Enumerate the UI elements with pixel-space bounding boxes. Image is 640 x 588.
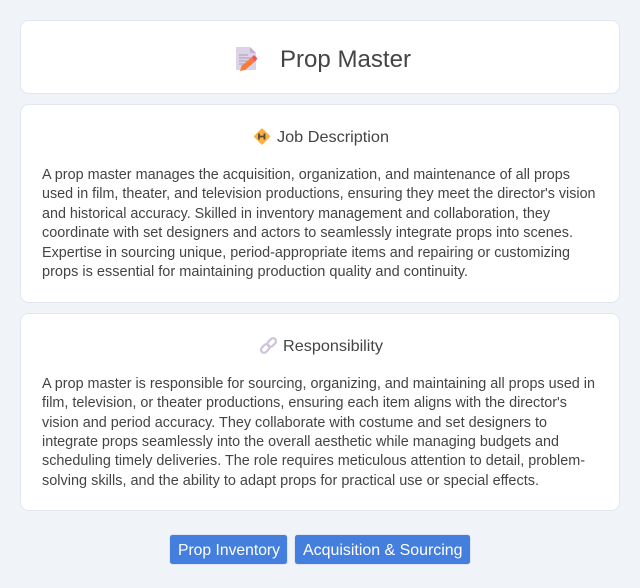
text block: responsibility: solving skills, and the ability to adapt props for practical use or special effects. [42, 473, 539, 489]
text block: job description: A prop master manages the acquisition, organization, and maintenance of all props [42, 167, 570, 183]
panel: responsibility [20, 314, 620, 510]
text block: job description: Expertise in sourcing unique, period-appropriate items and repairing or customizing [42, 245, 570, 261]
heading: job description: Job Description [277, 129, 389, 146]
panel: job description [20, 104, 620, 302]
tag: prop inventory: Prop Inventory [178, 542, 280, 559]
text block: job description: coordinate with set designers and actors to seamlessly integrate props into scenes. [42, 225, 573, 241]
text block: job description: props is essential for maintaining production quality and continuity. [42, 264, 468, 280]
icon: orange diamond sign [254, 129, 270, 144]
text block: job description: used in film, theater, and television productions, ensuring they meet the director's vision [42, 186, 596, 202]
text block: responsibility: scheduling timely deliveries. The role requires meticulous attention to detail, problem- [42, 453, 585, 469]
text block: responsibility: integrate props seamlessly into the overall aesthetic while managing budgets and [42, 434, 559, 450]
text block: responsibility: A prop master is responsible for sourcing, organizing, and maintaining all props used in [42, 376, 595, 392]
text block: responsibility: film, television, or theater productions, ensuring each item aligns with the director's [42, 395, 567, 411]
text block: responsibility: vision and period accuracy. They collaborate with costume and set designers to [42, 415, 547, 431]
text block: job description: and historical accuracy. Skilled in inventory management and collaboration, they [42, 206, 551, 222]
icon: chain link [260, 337, 277, 354]
text block: responsibility [42, 376, 595, 489]
panel: title card [20, 20, 620, 94]
tag: prop inventory [170, 534, 288, 564]
heading: responsibility: Responsibility [283, 338, 383, 355]
icon: document with pencil [236, 47, 258, 71]
title: Prop Master [280, 46, 411, 73]
tag: acquisition and sourcing [294, 534, 470, 564]
tag: acquisition and sourcing: Acquisition & Sourcing [303, 542, 462, 559]
text block: job description [42, 167, 596, 280]
